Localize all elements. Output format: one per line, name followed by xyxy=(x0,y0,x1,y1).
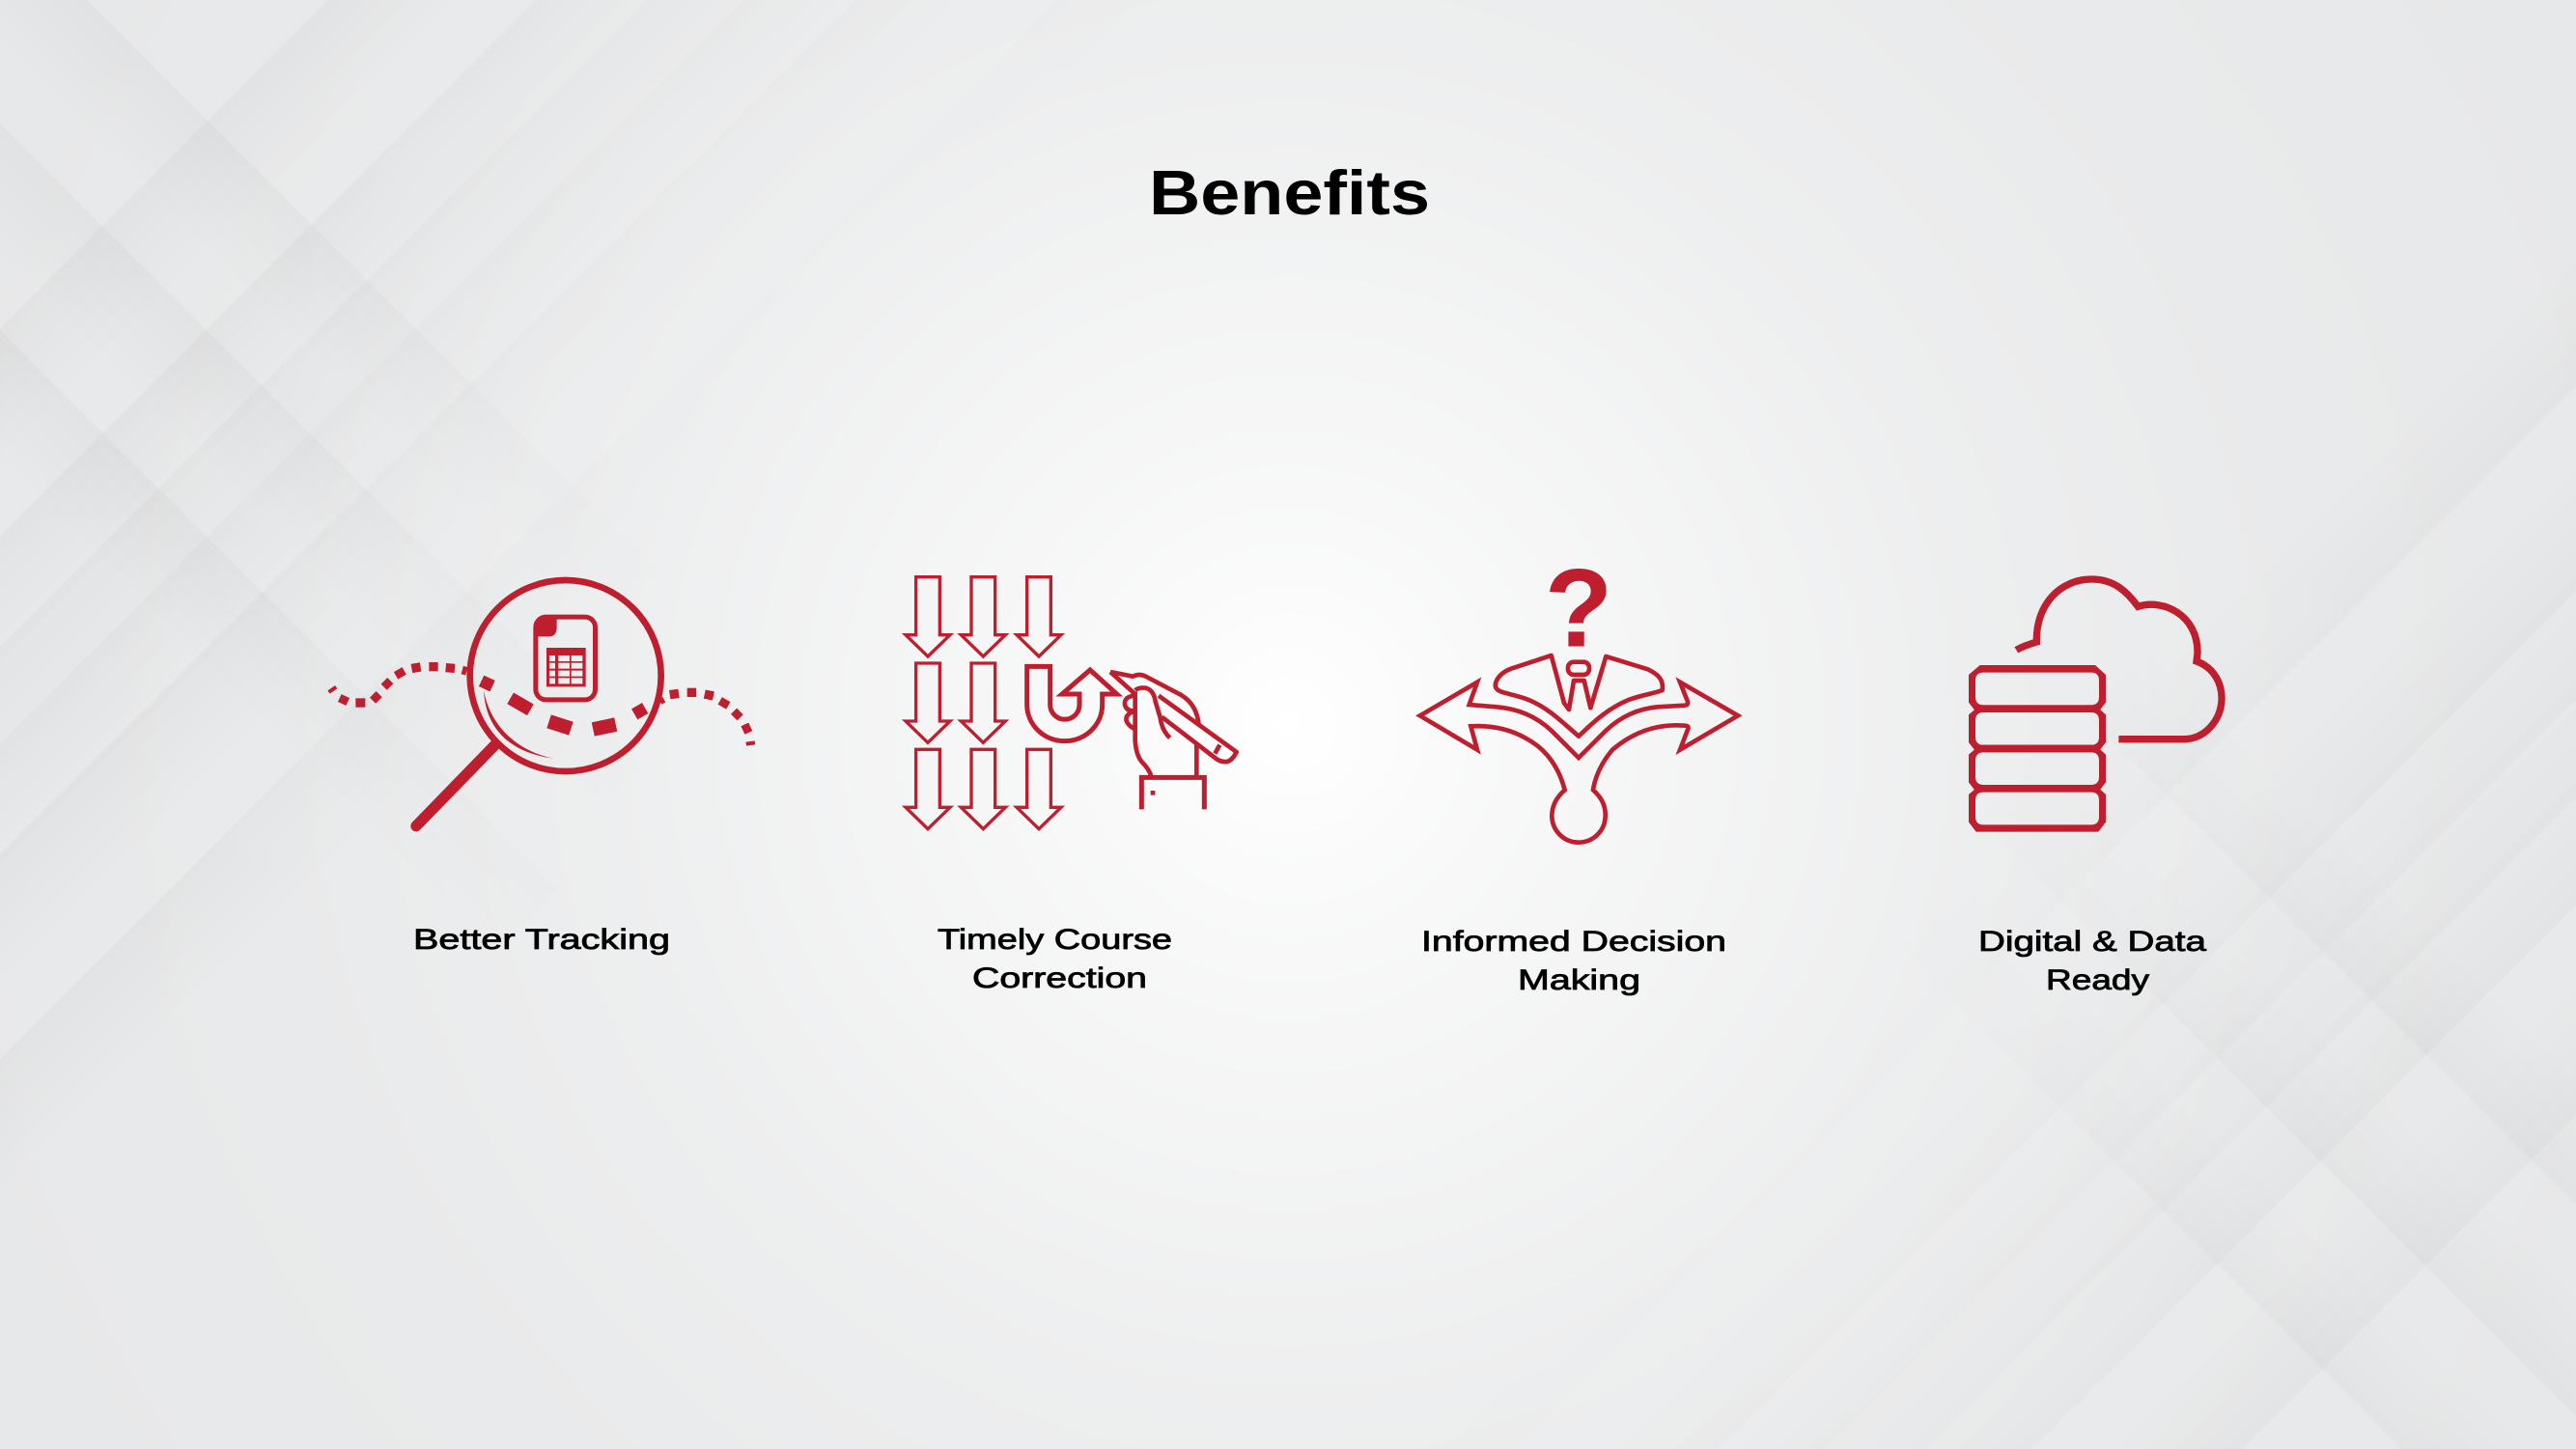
label: informed decision making: Making xyxy=(1518,964,1640,996)
panel: informed decision making xyxy=(1420,546,1738,996)
panel: digital and data ready xyxy=(1969,579,2222,996)
label: timely course correction: Timely Course xyxy=(938,924,1172,956)
icon: down arrows, U-turn arrow and hand with pen xyxy=(906,577,1237,829)
label: better tracking: Better Tracking xyxy=(413,924,670,956)
icon: businessman with question mark and diverging arrows xyxy=(1420,546,1738,843)
icon: magnifier over dashed path with spreadsheet xyxy=(327,580,755,826)
label: digital and data ready: Digital & Data xyxy=(1978,926,2206,958)
label: timely course correction: Correction xyxy=(972,962,1147,994)
panel: better tracking xyxy=(327,580,755,956)
label: digital and data ready xyxy=(1978,926,2206,996)
label: informed decision making xyxy=(1421,926,1726,996)
title: Benefits xyxy=(1149,157,1430,228)
icon: database stack and cloud xyxy=(1969,579,2222,832)
panel: timely course correction xyxy=(906,577,1237,994)
icon: businessman with question mark and diverging arrows: ? xyxy=(1545,546,1612,670)
label: digital and data ready: Ready xyxy=(2046,964,2149,996)
label: timely course correction xyxy=(938,924,1172,994)
label: informed decision making: Informed Decision xyxy=(1421,926,1726,958)
